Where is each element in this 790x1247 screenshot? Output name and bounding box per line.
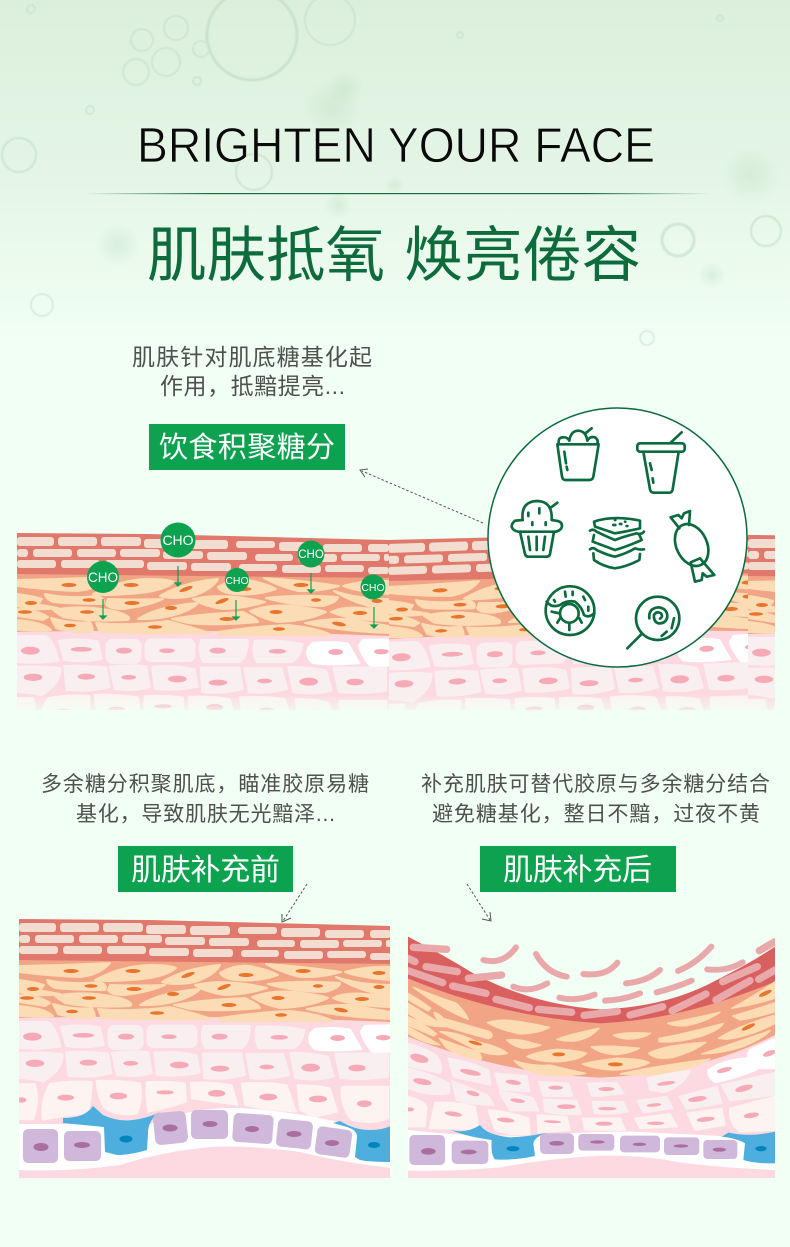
panel: skin after peptide, sunken surface <box>405 937 777 1178</box>
icon: lollipop <box>627 597 679 648</box>
icon: sandwich <box>590 518 644 568</box>
label box: before <box>118 846 293 892</box>
dashed arrow: after <box>467 884 491 921</box>
heading: Chinese title <box>147 222 641 289</box>
CHO molecule bubbles: CHO <box>225 575 249 587</box>
CHO molecule bubbles <box>87 522 386 600</box>
text block: before description: 基化，导致肌肤无光黯泽... <box>76 803 335 826</box>
icon: candy <box>668 511 715 582</box>
label box: before: 肌肤补充前 <box>131 854 280 887</box>
panel: skin before peptide <box>17 919 400 1178</box>
CHO molecule bubbles: CHO <box>361 582 385 594</box>
icon: donut <box>546 586 594 635</box>
label box: 饮食积聚糖分: 饮食积聚糖分 <box>159 431 335 464</box>
CHO molecule bubbles: CHO <box>88 570 118 585</box>
text block: intro description <box>132 344 372 399</box>
label box: 饮食积聚糖分 <box>149 424 345 470</box>
green down arrows <box>100 566 377 628</box>
text block: after description: 补充肌肤可替代胶原与多余糖分结合 <box>421 773 770 796</box>
panel: sugary food circle <box>488 408 747 667</box>
title: BRIGHTEN YOUR FACE: BRIGHTEN YOUR FACE <box>137 119 655 173</box>
divider line <box>85 193 710 194</box>
CHO molecule bubbles: CHO <box>298 549 324 561</box>
dashed arrow to label box <box>360 469 483 523</box>
heading: Chinese title: 肌肤抵氧 <box>147 222 385 289</box>
text block: before description: 多余糖分积聚肌底，瞄准胶原易糖 <box>41 773 369 796</box>
icon: drink cup <box>637 432 685 493</box>
text block: before description <box>41 773 369 826</box>
text block: after description: 避免糖基化，整日不黯，过夜不黄 <box>432 803 760 826</box>
text block: intro description: 肌肤针对肌底糖基化起 <box>132 344 372 370</box>
label box: after: 肌肤补充后 <box>503 854 652 887</box>
text block: after description <box>421 773 770 826</box>
heading: Chinese title: 焕亮倦容 <box>404 222 641 289</box>
flaking skin cells <box>408 942 775 1015</box>
CHO molecule bubbles: CHO <box>162 532 194 548</box>
text block: intro description: 作用，抵黯提亮... <box>160 373 345 399</box>
panel: top skin cross-section with CHO <box>17 522 775 710</box>
dashed arrow: before <box>282 884 307 922</box>
label box: after <box>480 846 676 892</box>
icon: muffin <box>512 501 562 557</box>
icon: food box <box>557 428 599 480</box>
